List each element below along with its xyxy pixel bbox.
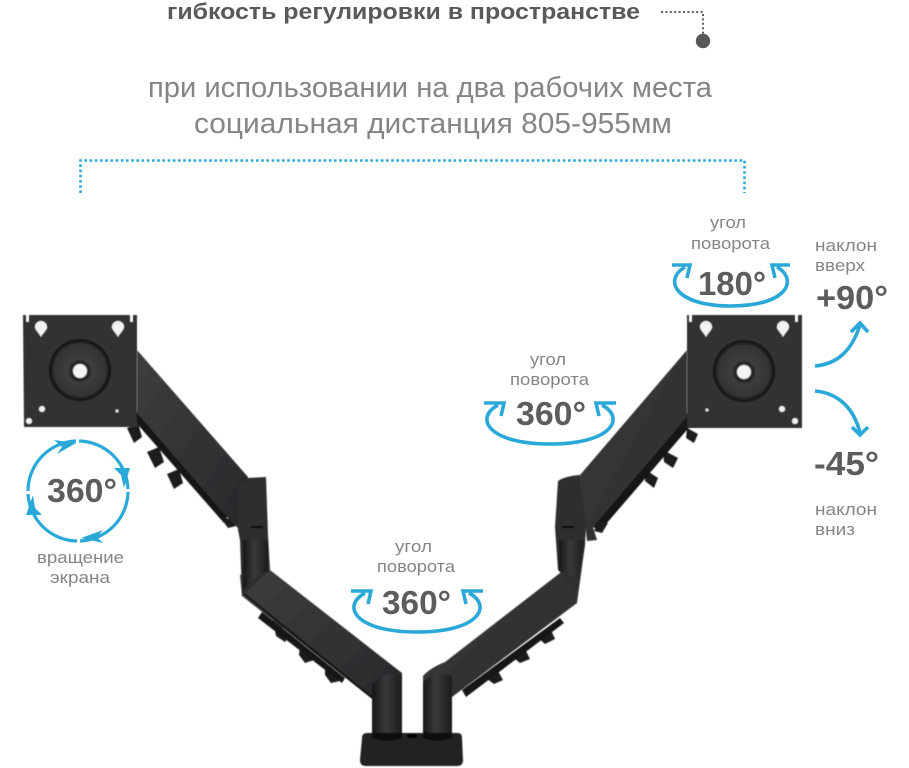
right lower column — [423, 674, 452, 738]
arrow: tilt down — [815, 391, 868, 435]
tilt up caption: вверх — [815, 256, 866, 275]
swivel caption: угол — [710, 213, 746, 232]
callout: head swivel 180 — [672, 213, 790, 306]
left upper arm — [137, 350, 248, 530]
subtitle: при использовании на два рабочих места — [148, 72, 713, 104]
swivel value: 180° — [698, 265, 766, 302]
tilt down caption — [815, 500, 877, 539]
dotted pointer with dot — [661, 12, 710, 48]
monitor arm: right — [423, 350, 698, 738]
left lower arm knobs — [258, 612, 345, 683]
swivel caption: угол — [530, 350, 566, 369]
tilt down caption: наклон — [815, 500, 877, 519]
callout: tilt up — [815, 236, 888, 366]
tilt down value: -45° — [814, 445, 879, 482]
swivel caption: поворота — [691, 234, 771, 253]
swivel value: 360° — [516, 395, 586, 432]
icon: circular rotation arrows — [26, 440, 130, 543]
icon: swivel arrow — [351, 591, 483, 632]
swivel caption: поворота — [377, 557, 456, 576]
callout: middle swivel 360 — [484, 350, 616, 444]
rotation caption — [37, 548, 124, 587]
right upper column — [555, 475, 586, 590]
tilt up caption — [815, 236, 877, 275]
left upper column — [237, 477, 270, 596]
icon: swivel arrow — [672, 265, 790, 306]
callout: base swivel 360 — [351, 537, 483, 632]
monitor arm: left — [127, 350, 402, 738]
right lower arm — [423, 545, 585, 698]
right VESA plate — [687, 315, 802, 428]
right upper arm knobs — [593, 412, 698, 533]
callout: tilt down — [814, 391, 879, 539]
left VESA plate — [23, 315, 137, 427]
desk clamp base — [360, 733, 463, 766]
subtitle: социальная дистанция 805-955мм — [194, 108, 672, 140]
left upper arm knobs — [127, 411, 236, 528]
swivel caption — [691, 213, 771, 253]
swivel caption — [510, 350, 590, 389]
tilt up value: +90° — [816, 279, 888, 316]
rotation caption: вращение — [37, 548, 124, 567]
swivel caption: угол — [395, 537, 432, 556]
arrow: tilt up — [815, 323, 868, 366]
icon: swivel arrow — [484, 403, 616, 444]
tilt up caption: наклон — [815, 236, 877, 255]
callout: screen rotation 360 — [26, 440, 130, 587]
right upper arm — [580, 350, 687, 541]
right lower arm knobs — [462, 618, 564, 697]
dotted distance bracket — [80, 160, 744, 193]
swivel caption: поворота — [510, 370, 590, 389]
rotation value: 360° — [47, 472, 117, 509]
left lower arm — [240, 570, 402, 702]
swivel value: 360° — [382, 584, 451, 621]
rotation caption: экрана — [50, 568, 111, 587]
swivel caption — [377, 537, 456, 576]
left lower column — [372, 674, 402, 738]
tilt down caption: вниз — [815, 520, 855, 539]
subtitle — [148, 72, 713, 140]
